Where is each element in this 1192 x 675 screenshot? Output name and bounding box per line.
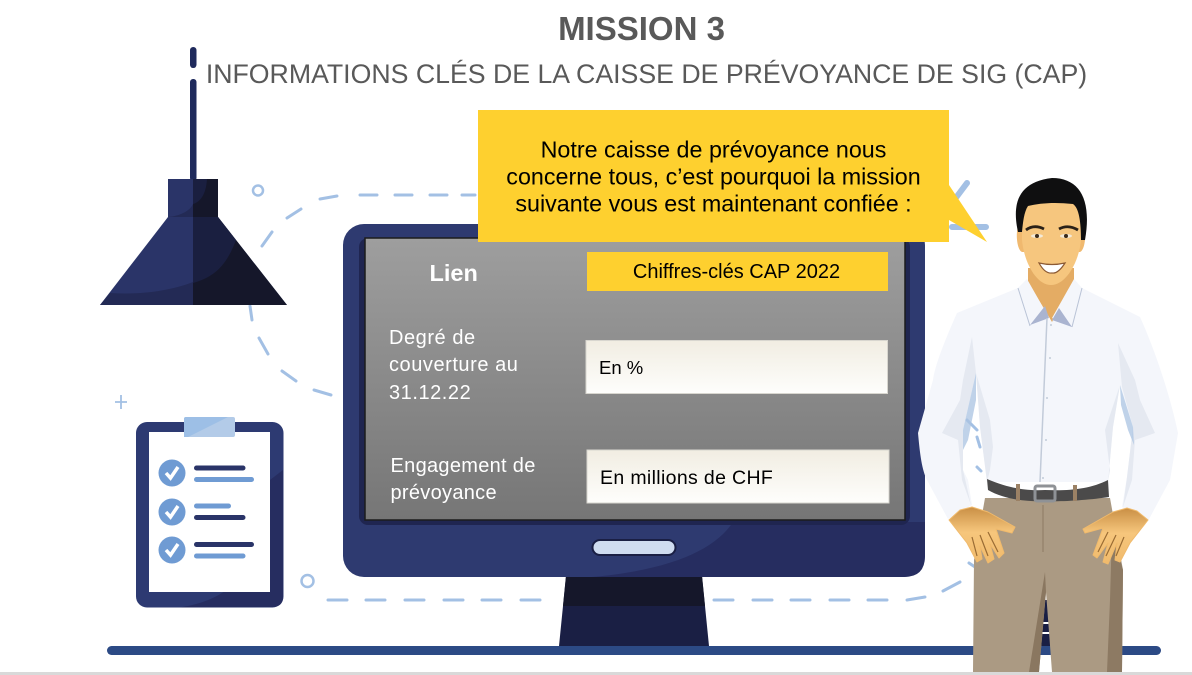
- label: engagement de prévoyance: Engagement de: [390, 455, 536, 477]
- callout: speech bubble: Notre caisse de prévoyance nous: [541, 136, 886, 162]
- shirt placket and buttons: [1040, 318, 1052, 482]
- check item 1: [158, 460, 254, 486]
- icon: small ring near monitor: [302, 575, 314, 587]
- input cell: en pourcentage: En %: [599, 357, 643, 378]
- callout: speech bubble: suivante vous est maintenant confiée :: [515, 190, 912, 216]
- character: man standing: [918, 178, 1178, 672]
- monitor button: [592, 540, 676, 555]
- collar: [1018, 279, 1082, 327]
- callout: speech bubble: [478, 110, 987, 242]
- label: degré de couverture: couverture au: [389, 354, 518, 376]
- label: degré de couverture: Degré de: [389, 327, 476, 349]
- trousers: [973, 498, 1123, 672]
- check item 3: [158, 536, 254, 564]
- label: degré de couverture: 31.12.22: [389, 382, 471, 404]
- title: MISSION 3: [558, 10, 725, 47]
- icon: plus sign: [115, 395, 127, 409]
- icon: pendant lamp: [100, 47, 287, 305]
- stand visible between the legs: [1040, 600, 1052, 646]
- shirt shading: [942, 337, 1155, 507]
- heading: Lien: Lien: [430, 260, 478, 286]
- head: [1016, 178, 1087, 285]
- left hand: [949, 507, 1015, 563]
- subtitle: INFORMATIONS CLÉS DE LA CAISSE DE PRÉVOYANCE DE SIG (CAP): [206, 59, 1087, 89]
- icon: small ring near lamp: [253, 186, 263, 196]
- floor line: [107, 646, 1161, 655]
- table header cell: Chiffres-clés CAP 2022: [633, 261, 840, 283]
- bottom grey strip: [0, 672, 1192, 675]
- table header cell: [587, 252, 888, 291]
- label: engagement de prévoyance: prévoyance: [390, 482, 497, 504]
- check item 2: [158, 498, 246, 526]
- neck: [1028, 268, 1074, 322]
- input cell: en millions de CHF: [587, 450, 889, 503]
- input cell: en millions de CHF: En millions de CHF: [600, 467, 773, 489]
- icon: clipboard checklist: [136, 417, 284, 608]
- right hand: [1083, 508, 1148, 564]
- belt: [987, 479, 1109, 501]
- shirt: [918, 288, 1178, 521]
- icon: computer monitor: [343, 224, 925, 646]
- callout: speech bubble: concerne tous, c’est pourquoi la mission: [506, 164, 921, 190]
- panel: screen table: [365, 238, 905, 520]
- input cell: en pourcentage: [586, 340, 888, 394]
- dashed decorative path: [250, 183, 986, 600]
